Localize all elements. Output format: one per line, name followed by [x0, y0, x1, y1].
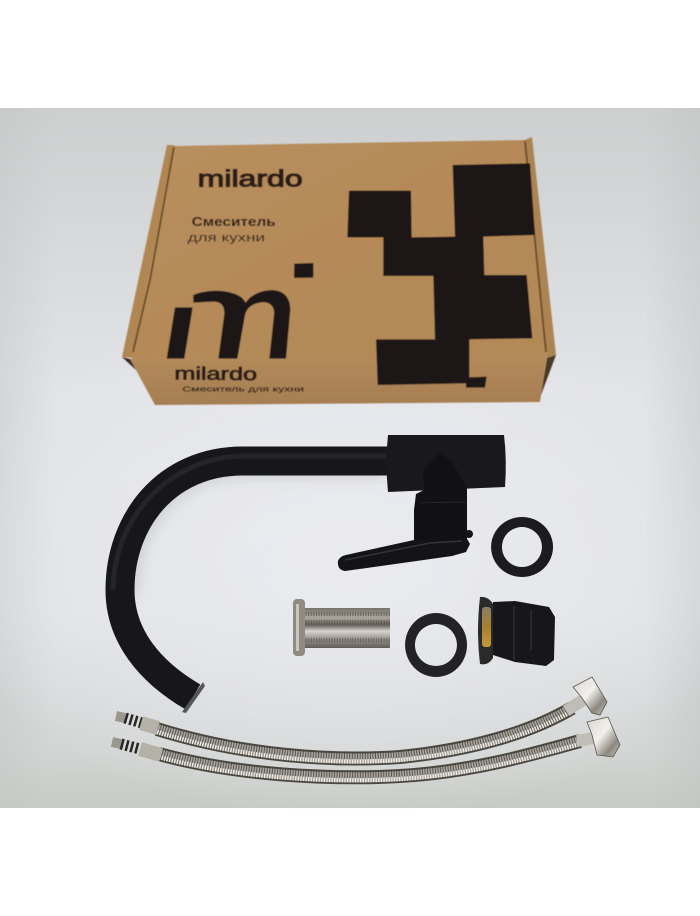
- mixer body: [386, 435, 506, 492]
- box right flap: [525, 137, 556, 358]
- braided hoses: [112, 677, 620, 780]
- mixer neck: [414, 453, 467, 542]
- upper hose: [116, 698, 586, 762]
- lower hose left fitting: [112, 742, 121, 744]
- spout tip: [182, 682, 205, 713]
- front brand name: milardo: [174, 363, 257, 384]
- upper hex nut: [573, 677, 607, 715]
- lever handle: [338, 537, 470, 571]
- box print in zoom coordinates: [167, 163, 535, 394]
- lower hex nut: [587, 717, 620, 757]
- square dot: [294, 263, 313, 278]
- brand name: milardo: [198, 166, 303, 192]
- cardboard box: [122, 137, 556, 405]
- threaded tube: [293, 599, 390, 656]
- neck knob: [465, 530, 473, 538]
- faucet shadow: [130, 470, 385, 595]
- tube flange: [293, 599, 305, 656]
- mounting nut: [478, 597, 555, 666]
- box front face: [130, 357, 547, 405]
- nut flange: [478, 597, 493, 664]
- lower hose right collar: [577, 738, 594, 741]
- curved spout: [113, 456, 388, 713]
- product title: Смеситель: [192, 215, 276, 229]
- upper hose left fitting: [116, 716, 125, 718]
- large m logo: [167, 290, 290, 359]
- lower hose: [112, 738, 594, 780]
- brass insert: [482, 607, 491, 647]
- faucet parts: [113, 435, 555, 713]
- rubber ring upper: [491, 517, 553, 577]
- photo background: [0, 108, 700, 820]
- rubber ring lower: [405, 613, 467, 677]
- box left flap: [122, 145, 174, 358]
- box top face: [132, 140, 547, 359]
- upper hose right collar: [566, 698, 586, 711]
- product subtitle: для кухни: [188, 231, 265, 245]
- front product label: Смеситель для кухни: [182, 385, 304, 394]
- black pixel graphic: [347, 163, 535, 388]
